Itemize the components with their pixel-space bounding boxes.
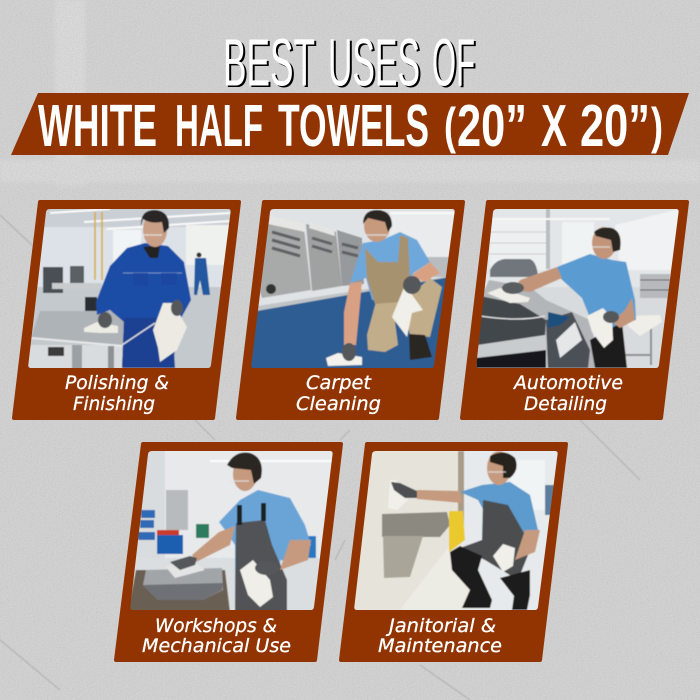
heading: BEST USES OF: BEST <box>225 27 317 102</box>
photo: worker detailing a car <box>476 209 679 368</box>
title banner: TOWELS <box>278 93 429 159</box>
label: Finishing <box>73 393 155 415</box>
label: Polishing & <box>65 372 169 394</box>
title banner: 20” <box>580 93 650 159</box>
label: Detailing <box>524 393 607 415</box>
card frame <box>341 444 566 660</box>
photo: worker wiping a wall by a drinking fountain <box>350 448 565 613</box>
title banner: 20” <box>457 93 527 159</box>
label <box>512 372 623 415</box>
card frame <box>14 202 239 418</box>
panel: polishing and finishing <box>14 202 239 418</box>
photo: worker polishing a steel table <box>28 209 231 368</box>
label: Automotive <box>512 372 623 394</box>
heading: BEST USES OF <box>223 26 477 102</box>
label: Cleaning <box>296 393 381 415</box>
label <box>65 372 169 415</box>
label: Maintenance <box>378 635 502 657</box>
title banner: HALF <box>175 93 263 159</box>
card frame <box>116 444 341 660</box>
photo: worker cleaning mechanical part <box>125 448 340 613</box>
label: Janitorial & <box>385 615 496 637</box>
title banner: ) <box>651 98 663 154</box>
label <box>296 372 381 415</box>
title banner: WHITE <box>38 93 157 159</box>
text: OF <box>432 26 475 100</box>
title banner: X <box>541 93 567 159</box>
heading: BEST USES OF: USES <box>328 26 420 100</box>
card frame <box>462 202 687 418</box>
heading: BEST USES OF: BEST <box>223 26 315 100</box>
heading: BEST USES OF: USES <box>330 27 422 102</box>
card frame <box>238 202 463 418</box>
title banner <box>11 93 689 159</box>
label <box>142 615 291 657</box>
text: OF <box>434 27 477 102</box>
panel: automotive detailing <box>462 202 687 418</box>
panel: janitorial and maintenance <box>341 444 566 660</box>
panel: workshops and mechanical use <box>116 444 341 660</box>
title banner: ( <box>444 98 456 154</box>
label: Mechanical Use <box>142 635 291 657</box>
panel: carpet cleaning <box>238 202 470 418</box>
label <box>378 615 502 657</box>
photo: worker cleaning carpet <box>251 209 455 368</box>
label: Carpet <box>306 372 373 394</box>
label: Workshops & <box>155 615 277 637</box>
